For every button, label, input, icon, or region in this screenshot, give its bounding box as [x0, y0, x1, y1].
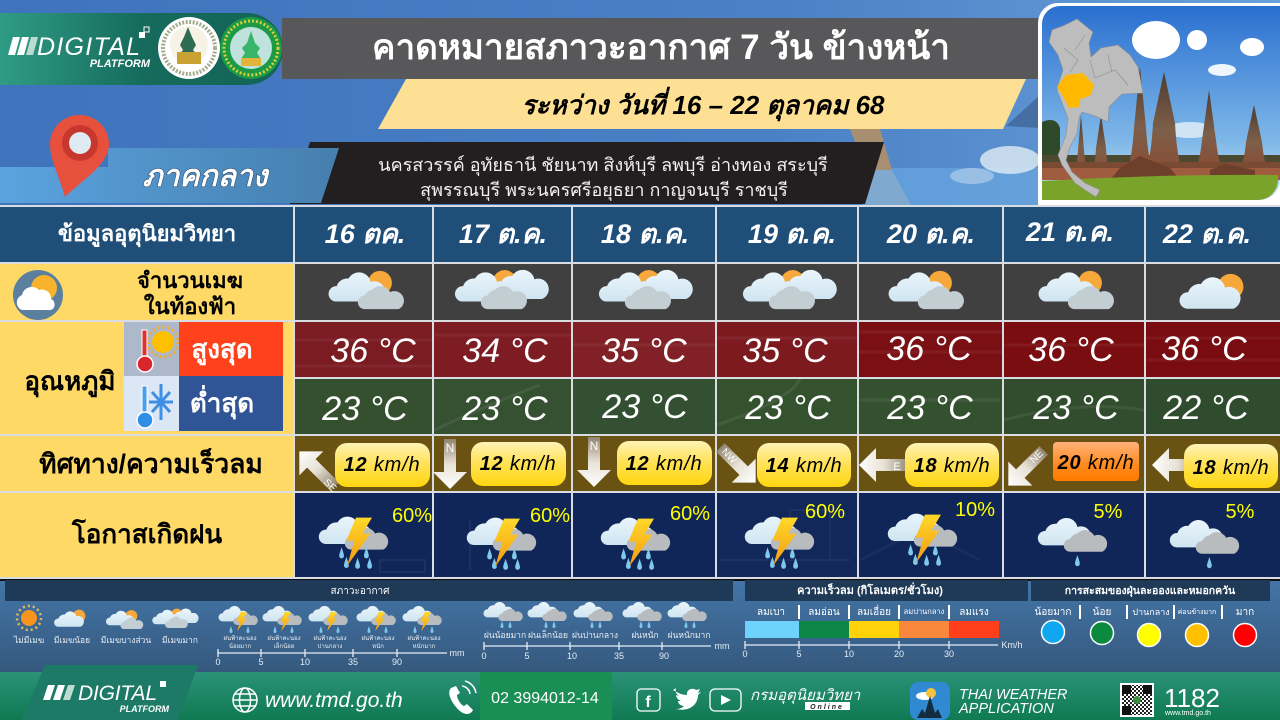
digital platform wordmark: PLATFORM — [90, 58, 151, 70]
rain rainfall scale: 90 — [659, 651, 669, 661]
rain row: 60% — [530, 505, 570, 527]
legend: wind speed: ลมแรง — [959, 607, 989, 618]
legend: wind speed: ลมปานกลาง — [904, 607, 945, 616]
thunderstorm rainfall scale: 10 — [300, 657, 310, 667]
legend: dust and smoke: น้อยมาก — [1035, 606, 1071, 618]
icon: cloud cover 21 — [1039, 271, 1114, 309]
wind row — [0, 435, 1280, 499]
map of Thailand — [1049, 19, 1143, 197]
region provinces band: สุพรรณบุรี พระนครศรีอยุธยา กาญจนบุรี ราชบุรี — [420, 180, 788, 201]
department online label: กรมอุตุนิยมวิทยา — [750, 687, 861, 704]
rain rainfall scale: 0 — [481, 651, 487, 661]
rain rainfall scale — [481, 641, 730, 661]
icon: mostly cloudy — [152, 609, 199, 628]
cloud row — [0, 264, 1280, 320]
temperature rows: 35 °C — [601, 332, 687, 370]
thunderstorm labels: หนัก — [372, 643, 384, 650]
arrow: NE wind — [996, 438, 1056, 498]
icon: facebook: f — [645, 694, 651, 711]
temperature rows: 23 °C — [1032, 389, 1119, 427]
icon: thai weather app — [910, 682, 950, 720]
arrow: N wind 17 — [433, 439, 467, 489]
legend: wind speed: 10 — [844, 649, 854, 659]
region name band — [0, 148, 339, 203]
icon: clear sky — [17, 606, 41, 630]
thunderstorm labels: ฝนฟ้าคะนอง — [313, 635, 347, 642]
thunderstorm labels: ฝนฟ้าคะนอง — [407, 635, 441, 642]
icon: few clouds — [54, 610, 85, 627]
legend: wind speed: 5 — [796, 649, 802, 659]
arrow: E wind 22 — [1152, 448, 1202, 482]
thunderstorm rainfall scale: 35 — [348, 657, 358, 667]
temperature rows: 23 °C — [321, 390, 408, 428]
legend: weather conditions: มีเมฆน้อย — [54, 635, 90, 645]
legend strip — [0, 579, 1280, 672]
legend: wind speed: ลมเบา — [757, 607, 785, 618]
icon: youtube — [710, 689, 741, 711]
table header row — [0, 207, 1280, 262]
icon: cloud cover 22 — [1179, 274, 1243, 309]
wind row: ทิศทาง/ความเร็วลม — [39, 447, 263, 479]
icon: telephone — [449, 681, 476, 714]
icon: light rain 22 — [1170, 520, 1239, 568]
arrow: E wind 20: E — [893, 461, 901, 473]
icon: twitter — [673, 688, 701, 710]
thunderstorm labels: ฝนฟ้าคะนอง — [223, 635, 257, 642]
thunderstorm rainfall scale: 90 — [392, 657, 402, 667]
region provinces band — [290, 142, 884, 204]
wind speed 18 — [617, 441, 712, 485]
thunderstorm labels: ปานกลาง — [318, 643, 343, 650]
arrow: NW wind — [708, 435, 768, 495]
legend: wind speed: 20 — [894, 649, 904, 659]
icon: cloud cover 19 — [743, 270, 837, 309]
table header row: 18 ต.ค. — [601, 219, 689, 249]
icon: rain scale — [483, 602, 707, 628]
icon: partly cloudy — [106, 610, 143, 629]
legend: dust and smoke: น้อย — [1093, 606, 1111, 618]
icon: thunderstorm 16 — [319, 517, 388, 569]
temperature rows: 23 °C — [744, 389, 831, 427]
wind speed 22 — [1184, 444, 1278, 488]
legend: wind speed: 30 — [944, 649, 954, 659]
wind speed 17 — [471, 442, 566, 486]
icon: cloud and sun badge — [13, 270, 63, 320]
table header row: 16 ตค. — [325, 219, 405, 249]
icon: thunderstorm 17 — [467, 518, 536, 570]
header logo: digital platform with seals — [0, 13, 283, 85]
table header row: ข้อมูลอุตุนิยมวิทยา — [58, 221, 236, 248]
department online label: Online — [810, 704, 844, 711]
icon: cloud cover 18 — [599, 270, 693, 309]
wind speed 19: 14 km/h — [766, 455, 842, 477]
legend: weather conditions: ไม่มีเมฆ — [13, 635, 44, 645]
legend: dust and smoke: ปานกลาง — [1132, 607, 1170, 617]
temperature rows: 35 °C — [742, 332, 828, 370]
forecast table — [0, 205, 1280, 579]
wind speed 16: 12 km/h — [344, 454, 420, 476]
icon: cloud cover 16 — [329, 271, 404, 309]
arrow: N wind 18: N — [590, 439, 598, 453]
arrow: SE wind: SE — [321, 477, 338, 495]
digital platform wordmark: DIGITAL — [37, 33, 140, 61]
table header row: 21 ต.ค. — [1025, 217, 1114, 247]
rain row: 60% — [805, 501, 845, 523]
rain row: 60% — [392, 505, 432, 527]
wind speed 18: 12 km/h — [626, 453, 702, 475]
thunderstorm rainfall scale — [215, 648, 464, 667]
thunderstorm rainfall scale: mm — [450, 648, 464, 658]
date banner — [378, 79, 1026, 129]
label: maximum: สูงสุด — [191, 334, 253, 366]
wind speed 19 — [757, 443, 851, 487]
legend: wind speed: ความเร็วลม (กิโลเมตร/ชั่วโมง) — [797, 582, 943, 597]
temperature rows: 36 °C — [886, 330, 972, 368]
arrow: SE wind — [287, 439, 347, 499]
legend: wind speed: ลมเอื่อย — [857, 604, 891, 618]
icon: cold thermometer — [124, 376, 179, 431]
legend: wind speed — [742, 580, 1028, 659]
icon: light rain 21 — [1038, 518, 1107, 566]
icon: globe — [233, 688, 257, 712]
legend: wind speed: Km/h — [1001, 640, 1023, 650]
digital platform wordmark — [8, 27, 151, 70]
icon: thunderstorm 20 — [888, 514, 957, 566]
thunderstorm labels: ฝนฟ้าคะนอง — [361, 635, 395, 642]
thunderstorm labels: หนักมาก — [413, 643, 436, 650]
wind speed 21 — [1053, 442, 1139, 481]
rain labels: ฝนหนักมาก — [668, 630, 710, 640]
rain rainfall scale: 10 — [567, 651, 577, 661]
temperature rows: 23 °C — [461, 390, 548, 428]
rain row: 10% — [955, 499, 995, 521]
thunderstorm labels: ฝนฟ้าคะนอง — [267, 635, 301, 642]
temperature rows: 34 °C — [462, 332, 548, 370]
legend: weather conditions: สภาวะอากาศ — [331, 586, 390, 597]
icon: cloud cover 17 — [455, 270, 549, 309]
rain row — [0, 493, 1280, 577]
temperature rows: 36 °C — [1161, 330, 1247, 368]
legend: wind speed: ลมอ่อน — [808, 607, 840, 618]
footer: APPLICATION — [958, 701, 1054, 717]
footer: THAI WEATHER — [959, 687, 1068, 703]
arrow: E wind 20 — [859, 448, 909, 482]
arrow: NW wind: NW — [719, 447, 739, 467]
wind speed 20: 18 km/h — [914, 455, 990, 477]
icon: facebook — [637, 689, 660, 711]
table header row: 22 ต.ค. — [1162, 219, 1251, 249]
wind speed 20 — [905, 443, 999, 487]
table header row: 17 ต.ค. — [459, 219, 547, 249]
icon: thunderstorm 19 — [745, 517, 814, 569]
rain row: 5% — [1226, 501, 1255, 523]
footer digital platform logo — [22, 665, 198, 720]
date banner: ระหว่าง วันที่ 16 – 22 ตุลาคม 68 — [522, 86, 885, 122]
icon: hot thermometer — [124, 322, 179, 376]
cloud row: ในท้องฟ้า — [144, 293, 236, 319]
rain labels: ฝนหนัก — [631, 630, 659, 640]
rain row: 60% — [670, 503, 710, 525]
thunderstorm labels — [223, 635, 441, 650]
wind speed 22: 18 km/h — [1193, 457, 1269, 479]
rain labels: ฝนน้อยมาก — [484, 630, 526, 640]
thunderstorm labels: เล็กน้อย — [274, 641, 294, 650]
footer — [0, 665, 1280, 720]
temperature rows: อุณหภูมิ — [24, 366, 116, 398]
region name band: ภาคกลาง — [143, 160, 270, 193]
rain row: 5% — [1094, 501, 1123, 523]
footer: www.tmd.go.th — [265, 689, 403, 712]
icon: thunderstorm 18 — [601, 518, 670, 570]
arrow: N wind 17: N — [446, 441, 454, 455]
region provinces band: นครสวรรค์ อุทัยธานี ชัยนาท สิงห์บุรี ลพบุรี อ่างทอง สระบุรี — [378, 155, 828, 176]
rain labels: ฝนปานกลาง — [572, 630, 618, 640]
wind speed 21: 20 km/h — [1057, 452, 1134, 474]
rain rainfall scale: 35 — [614, 651, 624, 661]
temperature rows: 36 °C — [1028, 331, 1114, 369]
rain rainfall scale: 5 — [524, 651, 530, 661]
legend: dust and smoke — [1031, 580, 1270, 646]
footer digital platform logo: DIGITAL — [78, 682, 157, 705]
hotline 1182: www.tmd.go.th — [1164, 710, 1211, 717]
temple photo — [1042, 21, 1280, 200]
thunderstorm rainfall scale: 5 — [258, 657, 264, 667]
label: minimum: ต่ำสุด — [190, 384, 254, 420]
footer digital platform logo: PLATFORM — [120, 704, 169, 714]
temperature rows: 23 °C — [601, 388, 688, 426]
temperature rows: 22 °C — [1162, 389, 1249, 427]
thunderstorm labels: น้อยมาก — [229, 643, 251, 650]
temperature rows — [0, 322, 1280, 434]
arrow: NE wind: NE — [1028, 448, 1046, 466]
phone number — [480, 672, 612, 720]
title bar: คาดหมายสภาวะอากาศ 7 วัน ข้างหน้า — [372, 28, 950, 67]
map and temple photo — [1038, 3, 1280, 205]
wind speed 16 — [335, 443, 430, 487]
legend: dust and smoke: มาก — [1236, 607, 1254, 618]
legend: weather conditions: มีเมฆบางส่วน — [101, 635, 151, 645]
phone number: 02 3994012-14 — [491, 690, 599, 707]
table header row: 19 ต.ค. — [748, 219, 836, 249]
arrow: E wind 22: E — [1185, 461, 1193, 473]
temperature rows: 36 °C — [330, 332, 416, 370]
table header row: 20 ต.ค. — [886, 219, 975, 249]
icon: cloud cover 20 — [889, 271, 964, 309]
wind speed 17: 12 km/h — [480, 453, 556, 475]
legend: weather conditions — [5, 580, 733, 667]
rain labels: ฝนเล็กน้อย — [528, 629, 568, 640]
cloud row: จำนวนเมฆ — [137, 268, 243, 293]
legend: dust and smoke: ค่อนข้างมาก — [1178, 608, 1216, 616]
qr code — [1120, 683, 1154, 717]
seal: ministry — [158, 17, 220, 79]
seal: meteorological department — [220, 17, 282, 79]
legend: dust and smoke: การสะสมของฝุ่นละอองและหมอกควัน — [1065, 585, 1236, 598]
rain rainfall scale: mm — [714, 641, 730, 651]
thunderstorm rainfall scale: 0 — [215, 657, 221, 667]
hotline 1182: 1182 — [1164, 683, 1220, 713]
legend: wind speed: 0 — [742, 649, 748, 659]
label: minimum — [179, 376, 283, 431]
label: maximum — [179, 322, 283, 376]
title bar — [282, 18, 1039, 79]
icon: location pin — [50, 115, 109, 197]
rain row: โอกาสเกิดฝน — [71, 518, 222, 549]
legend: weather conditions: มีเมฆมาก — [162, 635, 198, 645]
arrow: N wind 18 — [577, 437, 611, 487]
icon: thunderstorm scale — [218, 606, 442, 633]
rain labels — [484, 629, 710, 640]
temperature rows: 23 °C — [886, 389, 973, 427]
